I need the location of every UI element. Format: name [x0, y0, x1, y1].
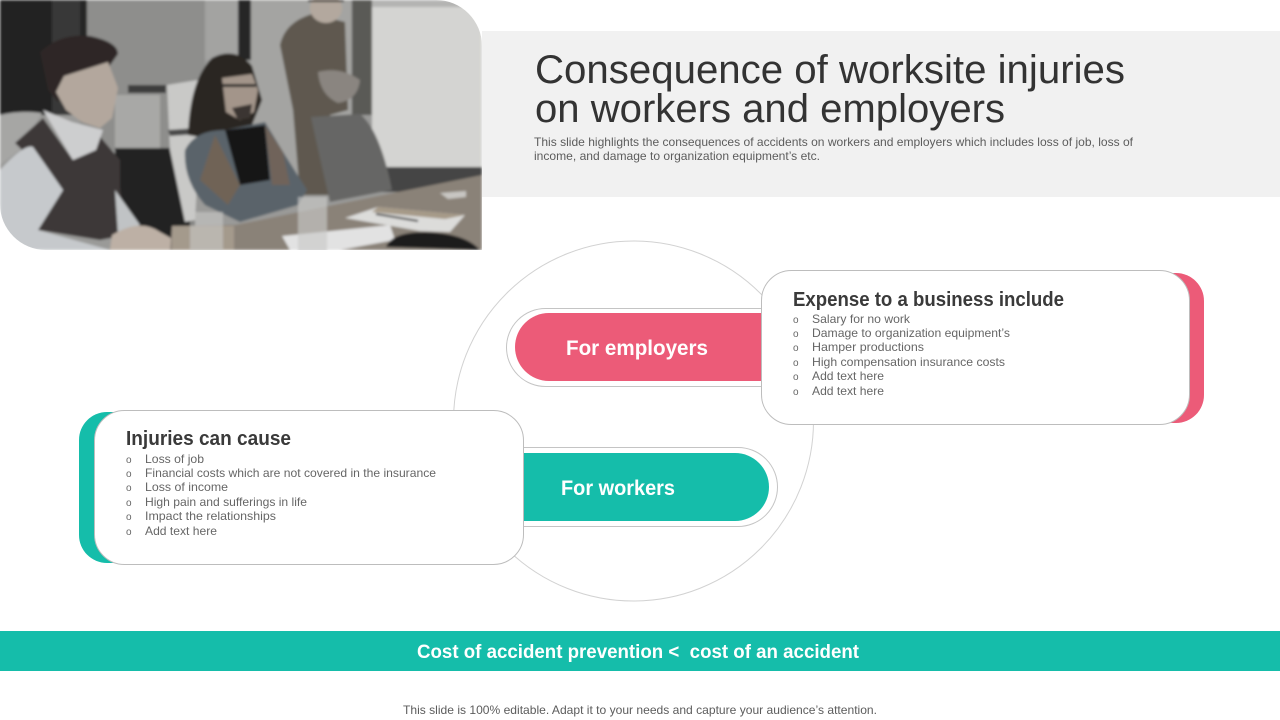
list: injury effects: o — [126, 455, 132, 466]
list: business expenses: Salary for no work — [812, 312, 911, 326]
list: injury effects: o — [126, 512, 132, 523]
card heading: Expense to a business include — [793, 289, 1064, 311]
card: injuries can cause — [79, 410, 524, 564]
list: business expenses: o — [793, 315, 799, 326]
footer note: This slide is 100% editable. Adapt it to your needs and capture your audience’s attention. — [403, 703, 877, 717]
card heading: Injuries can cause — [126, 428, 291, 450]
bottom banner — [0, 631, 1280, 671]
list: business expenses — [793, 312, 1010, 398]
list: injury effects: Loss of income — [145, 480, 228, 494]
large background circle — [454, 241, 814, 601]
list: business expenses: Damage to organization equipment’s — [812, 326, 1010, 340]
pill: for workers: For workers — [561, 477, 675, 500]
list: business expenses: o — [793, 329, 799, 340]
header band — [482, 31, 1280, 197]
subtitle: income, and damage to organization equipment’s etc. — [534, 149, 820, 163]
list: business expenses: Add text here — [812, 384, 884, 398]
list: injury effects: Add text here — [145, 524, 217, 538]
list: business expenses: o — [793, 343, 799, 354]
list: injury effects: Impact the relationships — [145, 509, 276, 523]
list: business expenses: o — [793, 387, 799, 398]
list: business expenses: o — [793, 372, 799, 383]
title — [535, 48, 1125, 131]
subtitle — [534, 135, 1134, 163]
list: injury effects: Financial costs which are not covered in the insurance — [145, 466, 436, 480]
list: injury effects: High pain and sufferings in life — [145, 495, 307, 509]
pill: for employers — [506, 308, 806, 386]
bottom banner: Cost of accident prevention < cost of an accident — [417, 642, 860, 663]
list: injury effects: o — [126, 527, 132, 538]
list: injury effects — [126, 452, 436, 538]
pill: for workers — [480, 448, 778, 526]
bottom dark area under blinds — [115, 148, 195, 250]
subtitle: This slide highlights the consequences of accidents on workers and employers which includes loss of job, loss of — [534, 135, 1134, 149]
list: business expenses: Add text here — [812, 369, 884, 383]
list: injury effects: Loss of job — [145, 452, 204, 466]
title: on workers and employers — [535, 87, 1005, 131]
photo: meeting at a conference table — [0, 0, 482, 252]
pill: for employers: For employers — [566, 337, 708, 360]
list: business expenses: Hamper productions — [812, 340, 924, 354]
list: injury effects: o — [126, 498, 132, 509]
title: Consequence of worksite injuries — [535, 48, 1125, 92]
card: expense to a business — [762, 270, 1204, 424]
list: business expenses: o — [793, 358, 799, 369]
list: injury effects: o — [126, 469, 132, 480]
list: injury effects: o — [126, 483, 132, 494]
list: business expenses: High compensation insurance costs — [812, 355, 1005, 369]
